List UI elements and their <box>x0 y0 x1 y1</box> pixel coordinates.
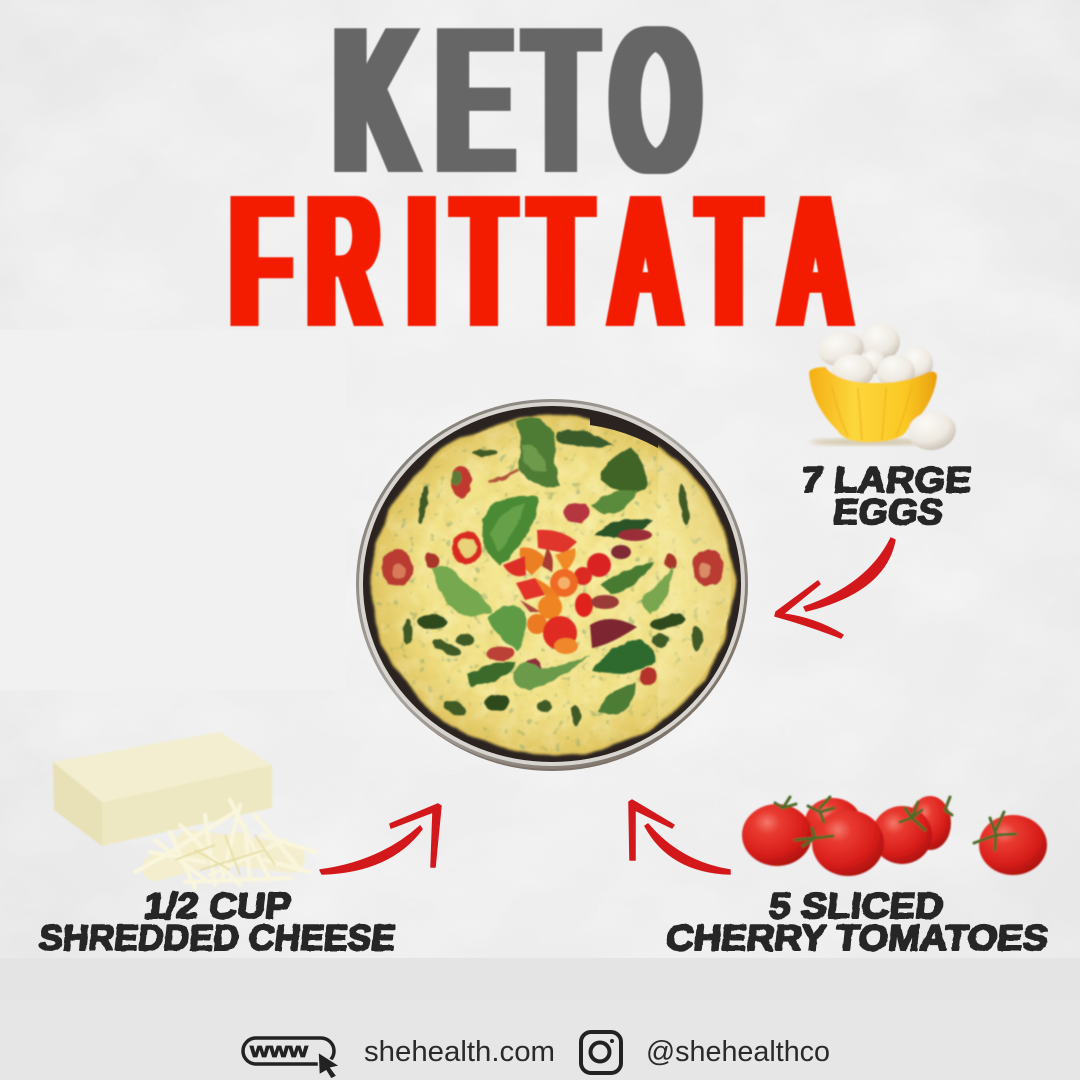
yellow bowl <box>809 367 937 442</box>
label: 1/2 cup shredded cheese: SHREDDED CHEESE <box>37 917 397 958</box>
pan rim <box>356 399 748 771</box>
tomato slices in egg <box>381 466 724 686</box>
tomato right <box>872 806 932 864</box>
icon: www cursor <box>243 1038 340 1079</box>
tomato left <box>742 804 812 866</box>
egg base <box>370 412 736 758</box>
instagram handle: @shehealthco <box>646 1036 830 1068</box>
label: 7 large eggs: EGGS <box>831 491 945 532</box>
cheese block <box>53 732 272 846</box>
label: 5 sliced cherry tomatoes <box>664 885 1050 958</box>
icon: instagram <box>581 1032 621 1073</box>
ingredient: cheese block and shreds <box>53 732 315 888</box>
label: 5 sliced cherry tomatoes: 5 SLICED <box>767 885 945 926</box>
eggs in bowl <box>815 323 933 389</box>
egg bowl shadow <box>810 438 930 446</box>
icon: www cursor: www <box>249 1040 309 1062</box>
bowl ribs <box>832 384 912 440</box>
spinach flecks <box>403 450 702 726</box>
label: 5 sliced cherry tomatoes: CHERRY TOMATOES <box>664 917 1050 958</box>
website: shehealth.com <box>364 1036 555 1068</box>
dark pan corner <box>590 414 658 448</box>
chopped tomatoes and peppers <box>503 529 652 654</box>
tomato stems <box>775 797 1016 850</box>
tomato back right <box>909 796 951 850</box>
tomato back left <box>805 798 861 846</box>
tomato single <box>979 815 1047 875</box>
frittata pan photo <box>356 399 748 771</box>
arrow: tomatoes to frittata <box>629 800 730 874</box>
arrow: cheese to frittata <box>320 804 441 874</box>
label: 1/2 cup shredded cheese: 1/2 CUP <box>142 885 293 926</box>
title: FRITTATA: FRITTATA <box>231 155 851 366</box>
label: 7 large eggs <box>799 459 973 532</box>
loose egg <box>906 409 958 453</box>
ingredient: cherry tomatoes <box>742 796 1047 876</box>
salad leaves <box>433 418 672 716</box>
footer <box>243 1032 830 1079</box>
label: 7 large eggs: 7 LARGE <box>799 459 973 500</box>
ingredient: bowl of eggs <box>809 323 958 453</box>
arrow: eggs to frittata <box>775 538 895 638</box>
shredded cheese <box>135 800 315 888</box>
label: 1/2 cup shredded cheese <box>37 885 397 958</box>
shred shadows <box>175 835 275 875</box>
tomato centre <box>812 810 884 876</box>
